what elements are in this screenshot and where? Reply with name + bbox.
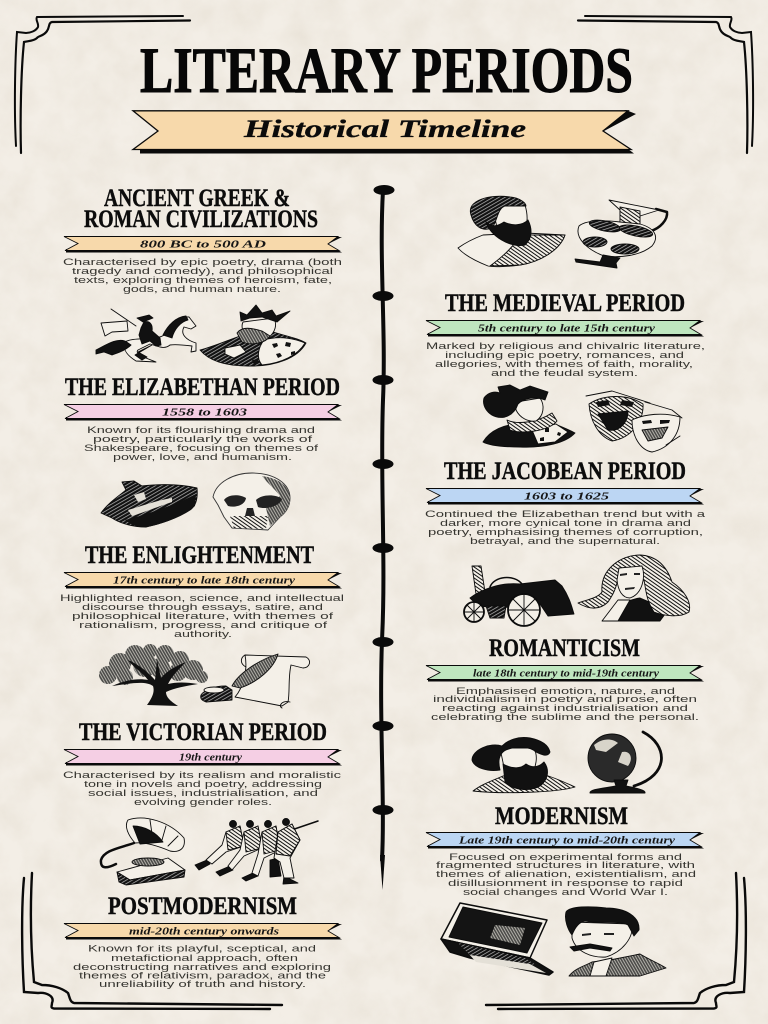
description: texts, exploring themes of heroism, fate,	[74, 275, 332, 285]
icon: Greek vase	[575, 200, 667, 268]
icon: tree	[99, 644, 208, 706]
icon: globe on stand	[588, 732, 661, 793]
timeline marker	[372, 291, 394, 301]
panel: Ancient Greek and Roman Civilizations	[63, 185, 342, 366]
heading: THE ELIZABETHAN PERIOD	[65, 374, 340, 401]
panel: The Medieval Period	[60, 290, 706, 989]
date ribbon	[426, 666, 704, 682]
description: disillusionment in response to rapid	[448, 878, 683, 888]
description: themes of alienation, existentialism, and	[436, 869, 696, 879]
panel: The Elizabethan Period	[64, 374, 342, 530]
timeline marker	[372, 459, 394, 469]
description: and the feudal system.	[491, 368, 638, 378]
description: Characterised by epic poetry, drama (both	[63, 257, 342, 267]
icon: laptop	[441, 903, 553, 975]
heading: ROMANTICISM	[489, 635, 640, 662]
icon: scroll and quill	[201, 654, 310, 708]
panel: The Enlightenment	[60, 542, 344, 708]
description: gods, and human nature.	[123, 284, 281, 294]
heading: ROMAN CIVILIZATIONS	[84, 206, 318, 233]
soldier one	[195, 820, 244, 870]
heading: ANCIENT GREEK &	[104, 185, 290, 212]
description: including epic poetry, romances, and	[445, 350, 684, 360]
date ribbon	[426, 832, 704, 848]
timeline marker	[374, 185, 394, 195]
icon: bearded Victorian man	[472, 737, 575, 793]
description	[426, 341, 705, 378]
date ribbon: 1603 to 1625	[524, 492, 609, 502]
description: tone in novels and poetry, addressing	[84, 779, 322, 789]
heading: POSTMODERNISM	[108, 893, 297, 920]
icon: bearded philosopher bust	[458, 196, 565, 267]
description: Characterised by its realism and moralistic	[63, 770, 342, 780]
description: Known for its flourishing drama and	[87, 425, 315, 435]
description	[425, 509, 706, 546]
description	[60, 593, 344, 639]
date ribbon: late 18th century to mid-19th century	[473, 668, 659, 680]
description: Emphasised emotion, nature, and	[456, 686, 675, 696]
icon: Elizabethan lady	[483, 385, 575, 447]
icon: royal crown	[101, 481, 197, 527]
date ribbon	[426, 488, 704, 504]
description: themes of relativism, paradox, and the	[79, 970, 326, 980]
icon: crowned king	[200, 305, 306, 366]
date ribbon: 1558 to 1603	[162, 408, 247, 418]
description: rationalism, progress, and critique of	[79, 620, 328, 630]
heading: THE VICTORIAN PERIOD	[79, 719, 327, 746]
timeline spine	[372, 185, 394, 890]
date ribbon: mid-20th century onwards	[129, 926, 279, 938]
heading	[84, 185, 318, 233]
description: celebrating the sublime and the personal.	[431, 712, 699, 722]
description: authority.	[174, 629, 232, 639]
description: unreliability of truth and history.	[99, 979, 306, 989]
timeline marker	[372, 375, 394, 385]
description	[73, 944, 331, 989]
date ribbon: 5th century to late 15th century	[478, 324, 655, 334]
description: discourse through essays, satire, and	[82, 602, 323, 612]
description: betrayal, and the supernatural.	[470, 536, 660, 546]
description: poetry, particularly the works of	[93, 434, 313, 444]
heading: THE MEDIEVAL PERIOD	[445, 290, 685, 317]
description: metafictional approach, often	[111, 953, 298, 963]
description	[84, 425, 319, 462]
icon: skull	[213, 473, 290, 530]
description: Focused on experimental forms and	[449, 852, 682, 862]
description	[63, 770, 342, 807]
description: allegories, with themes of faith, morality,	[435, 359, 693, 369]
description: tragedy and comedy), and philosophical	[72, 266, 333, 276]
icon: man in long wig	[578, 555, 690, 621]
description	[63, 257, 342, 294]
description: Known for its playful, sceptical, and	[88, 944, 316, 954]
icon: man with moustache	[565, 907, 666, 976]
decorative corner frame: top right	[578, 16, 753, 153]
description: Shakespeare, focusing on themes of	[84, 443, 319, 453]
date ribbon: Late 19th century to mid-20th century	[458, 836, 675, 846]
title ribbon: Historical Timeline: Historical Timeline	[243, 116, 526, 143]
icon: gramophone	[101, 818, 185, 885]
date ribbon	[64, 236, 342, 252]
soldier four	[270, 818, 300, 884]
date ribbon	[64, 572, 342, 588]
date ribbon	[64, 750, 342, 766]
decorative corner frame: bottom left	[22, 873, 282, 1009]
panel: Romanticism	[426, 635, 704, 793]
date ribbon: 19th century	[179, 752, 242, 764]
timeline marker	[372, 805, 394, 815]
description: Highlighted reason, science, and intellectual	[60, 593, 344, 603]
icon: marching soldiers	[195, 818, 318, 884]
date ribbon	[64, 404, 342, 420]
description: reacting against industrialisation and	[442, 703, 688, 713]
panel: The Jacobean Period	[425, 458, 706, 626]
timeline marker	[372, 721, 394, 731]
icon: theatre masks	[586, 391, 682, 452]
description: philosophical literature, with themes of	[72, 611, 334, 621]
description	[436, 852, 696, 897]
title ribbon: Historical Timeline	[133, 110, 636, 154]
timeline marker	[372, 637, 394, 647]
icon: horse and rider	[96, 309, 196, 362]
heading: MODERNISM	[495, 803, 628, 830]
decorative corner frame: bottom right	[486, 873, 746, 1009]
soldier three	[242, 820, 280, 881]
soldier two	[216, 820, 262, 876]
decorative corner frame: top left	[15, 16, 190, 153]
panel: Postmodernism	[64, 893, 342, 989]
date ribbon	[426, 320, 704, 336]
date ribbon	[64, 924, 342, 940]
description: deconstructing narratives and exploring	[73, 962, 331, 972]
title: LITERARY PERIODS	[140, 35, 633, 107]
icon: steam locomotive	[464, 566, 574, 626]
description: social changes and World War I.	[463, 887, 668, 897]
heading: THE JACOBEAN PERIOD	[444, 458, 686, 485]
description	[431, 686, 699, 722]
panel: Modernism	[426, 803, 704, 976]
panel: The Victorian Period	[63, 719, 342, 885]
description: individualism in poetry and prose, often	[433, 694, 697, 704]
description: darker, more cynical tone in drama and	[440, 518, 691, 528]
heading: THE ENLIGHTENMENT	[85, 542, 314, 569]
description: fragmented structures in literature, with	[436, 860, 695, 870]
description: social issues, industrialisation, and	[88, 788, 318, 798]
description: power, love, and humanism.	[113, 452, 292, 462]
date ribbon: 17th century to late 18th century	[113, 576, 295, 586]
date ribbon: 800 BC to 500 AD	[140, 240, 267, 250]
description: evolving gender roles.	[134, 797, 272, 807]
description: Continued the Elizabethan trend but with a	[425, 509, 706, 519]
timeline marker	[372, 543, 394, 553]
description: Marked by religious and chivalric literature,	[426, 341, 705, 351]
description: poetry, emphasising themes of corruption,	[428, 527, 703, 537]
